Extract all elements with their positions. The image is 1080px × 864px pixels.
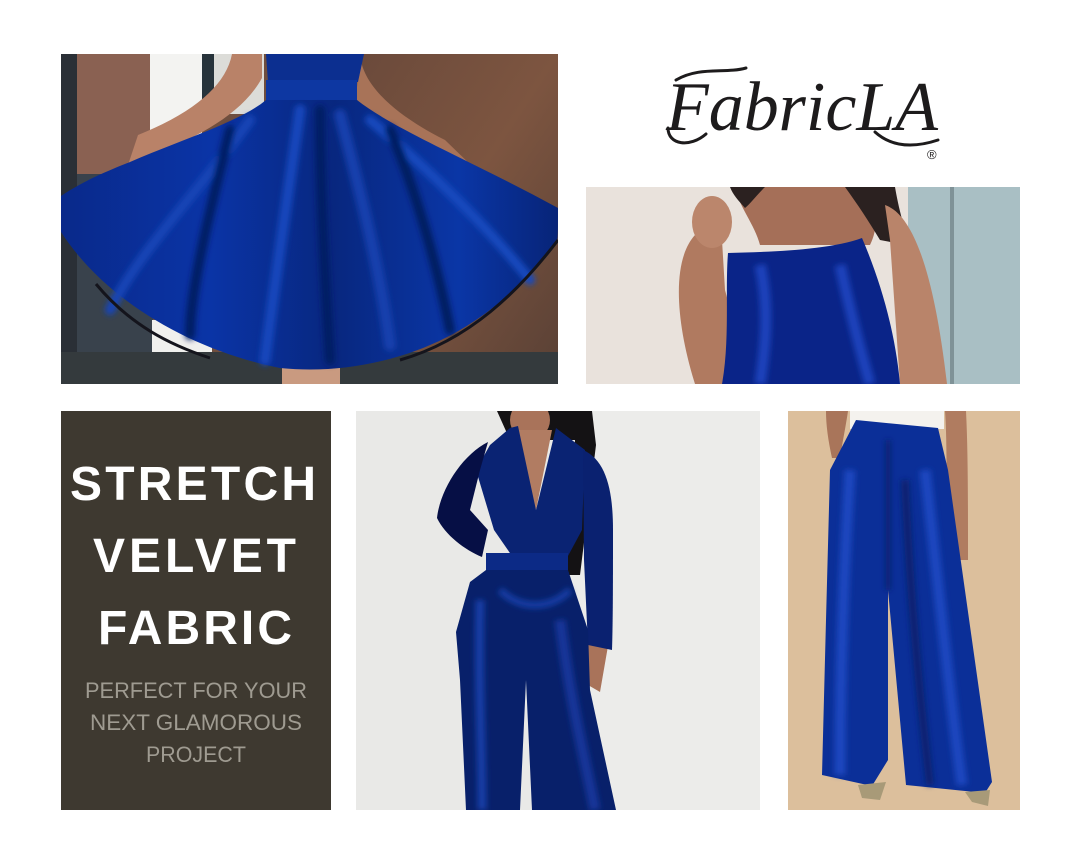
heading: stretch velvet fabric: STRETCH bbox=[70, 458, 316, 511]
logo: FabricLA: FabricLA bbox=[665, 69, 938, 146]
photo: wide-leg velvet trousers bbox=[788, 411, 1020, 810]
hair bbox=[497, 411, 596, 575]
photo: blue velvet circle skirt dress bbox=[61, 54, 558, 384]
subheading: tagline: PERFECT FOR YOUR bbox=[85, 678, 307, 703]
arm: right bbox=[357, 64, 467, 162]
heading: stretch velvet fabric: VELVET bbox=[93, 530, 296, 583]
panel: title block bbox=[61, 411, 331, 810]
hand bbox=[588, 645, 608, 692]
heading: stretch velvet fabric: FABRIC bbox=[98, 602, 292, 655]
registered mark: ® bbox=[927, 147, 937, 162]
photo: velvet jumpsuit bbox=[356, 400, 760, 810]
subheading: tagline: PROJECT bbox=[146, 742, 246, 767]
heading: stretch velvet fabric bbox=[70, 458, 316, 655]
infographic canvas bbox=[61, 54, 1020, 810]
trousers bbox=[456, 570, 616, 810]
subheading: tagline bbox=[85, 678, 307, 767]
jacket bbox=[476, 426, 585, 556]
arm: left bbox=[128, 54, 262, 165]
logo swash bbox=[668, 68, 938, 145]
subheading: tagline: NEXT GLAMOROUS bbox=[90, 710, 302, 735]
photo: velvet camisole top bbox=[586, 187, 1020, 384]
